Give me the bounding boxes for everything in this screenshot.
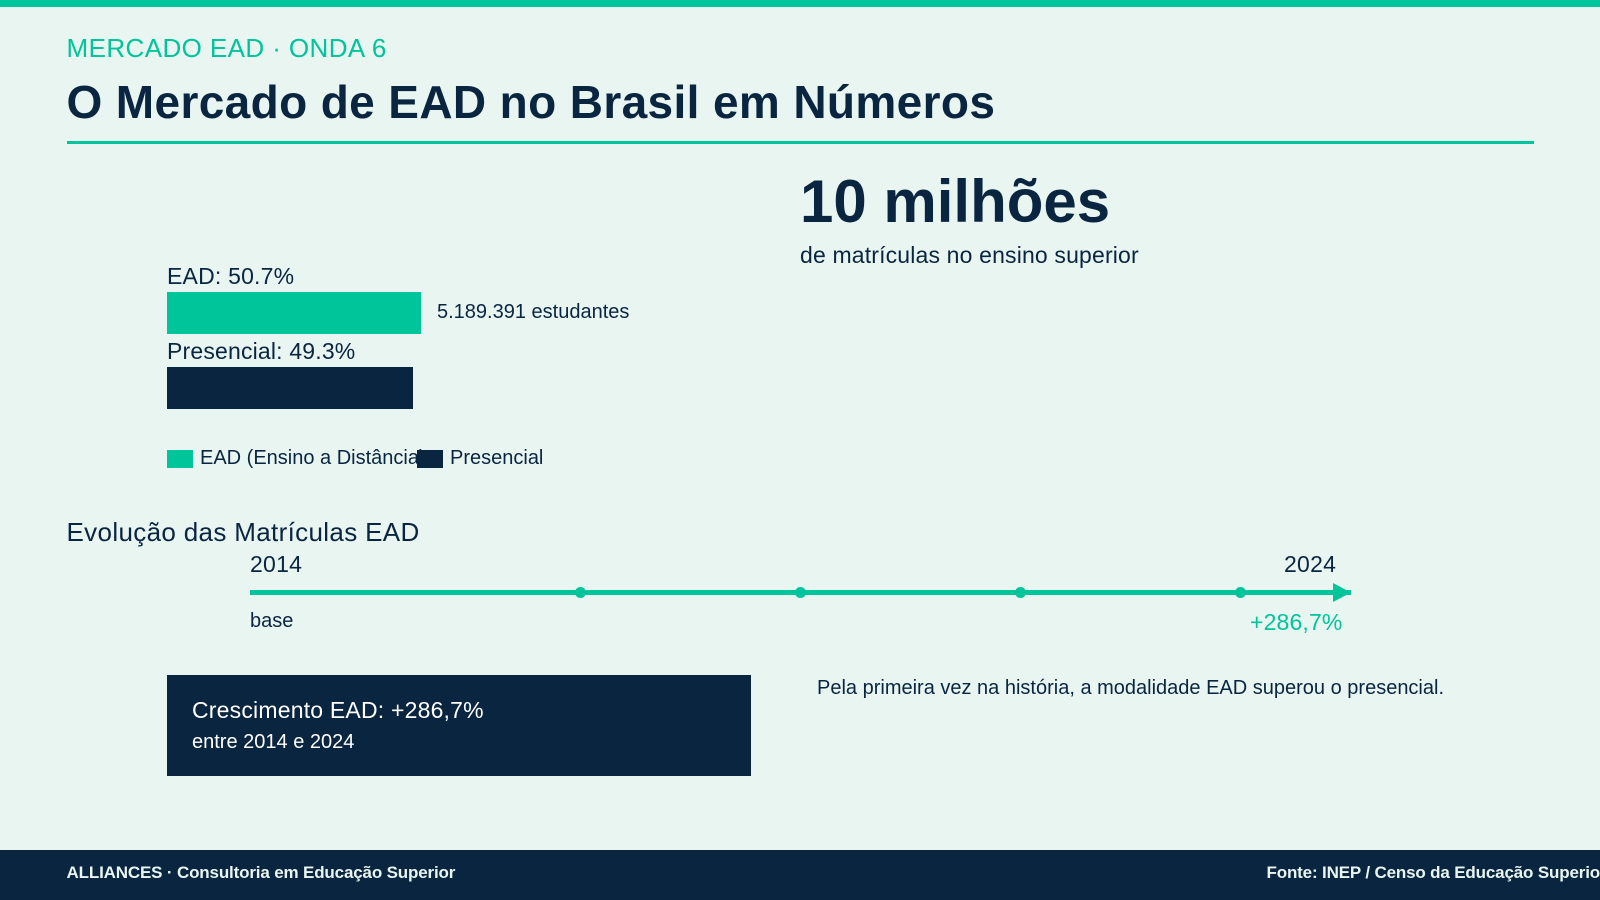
timeline marker 2 xyxy=(795,587,806,598)
section heading: evolution: Evolução das Matrículas EAD xyxy=(66,517,420,547)
title: O Mercado de EAD no Brasil em Números xyxy=(66,76,995,128)
big number: 10 milhões xyxy=(800,168,1110,235)
footer brand: ALLIANCES · Consultoria em Educação Superior xyxy=(66,863,455,882)
insight text: Pela primeira vez na história, a modalidade EAD superou o presencial. xyxy=(817,677,1444,699)
eyebrow: MERCADO EAD · ONDA 6 xyxy=(66,33,387,63)
EAD bar xyxy=(167,292,421,334)
timeline marker 1 xyxy=(575,587,586,598)
callout heading: Crescimento EAD: +286,7% xyxy=(192,697,484,723)
arrow head xyxy=(1333,583,1346,602)
start caption: base xyxy=(250,610,293,632)
footer source: Fonte: INEP / Censo da Educação Superior xyxy=(1266,863,1600,882)
header xyxy=(66,33,1534,144)
start year: 2014 xyxy=(250,551,302,577)
timeline marker 4 xyxy=(1235,587,1246,598)
footer xyxy=(0,850,1600,900)
legend swatch: EAD xyxy=(167,450,193,468)
callout subtext: entre 2014 e 2024 xyxy=(192,731,354,753)
big number callout xyxy=(800,168,1139,268)
end growth value: +286,7% xyxy=(1250,609,1342,635)
timeline line xyxy=(250,590,1351,595)
legend xyxy=(167,447,543,469)
big number caption: de matrículas no ensino superior xyxy=(800,242,1139,268)
timeline xyxy=(250,551,1351,635)
bar chart: EAD vs presencial xyxy=(167,263,629,409)
end year: 2024 xyxy=(1284,551,1336,577)
legend swatch: presencial xyxy=(417,450,443,468)
top accent bar xyxy=(0,0,1600,7)
presencial bar xyxy=(167,367,413,409)
EAD bar label: EAD: 50.7% xyxy=(167,263,294,289)
timeline marker 3 xyxy=(1015,587,1026,598)
EAD student count: 5.189.391 estudantes xyxy=(437,301,629,323)
growth callout box xyxy=(167,675,751,776)
legend label: EAD: EAD (Ensino a Distância) xyxy=(200,447,426,469)
presencial bar label: Presencial: 49.3% xyxy=(167,338,355,364)
legend label: presencial: Presencial xyxy=(450,447,543,469)
